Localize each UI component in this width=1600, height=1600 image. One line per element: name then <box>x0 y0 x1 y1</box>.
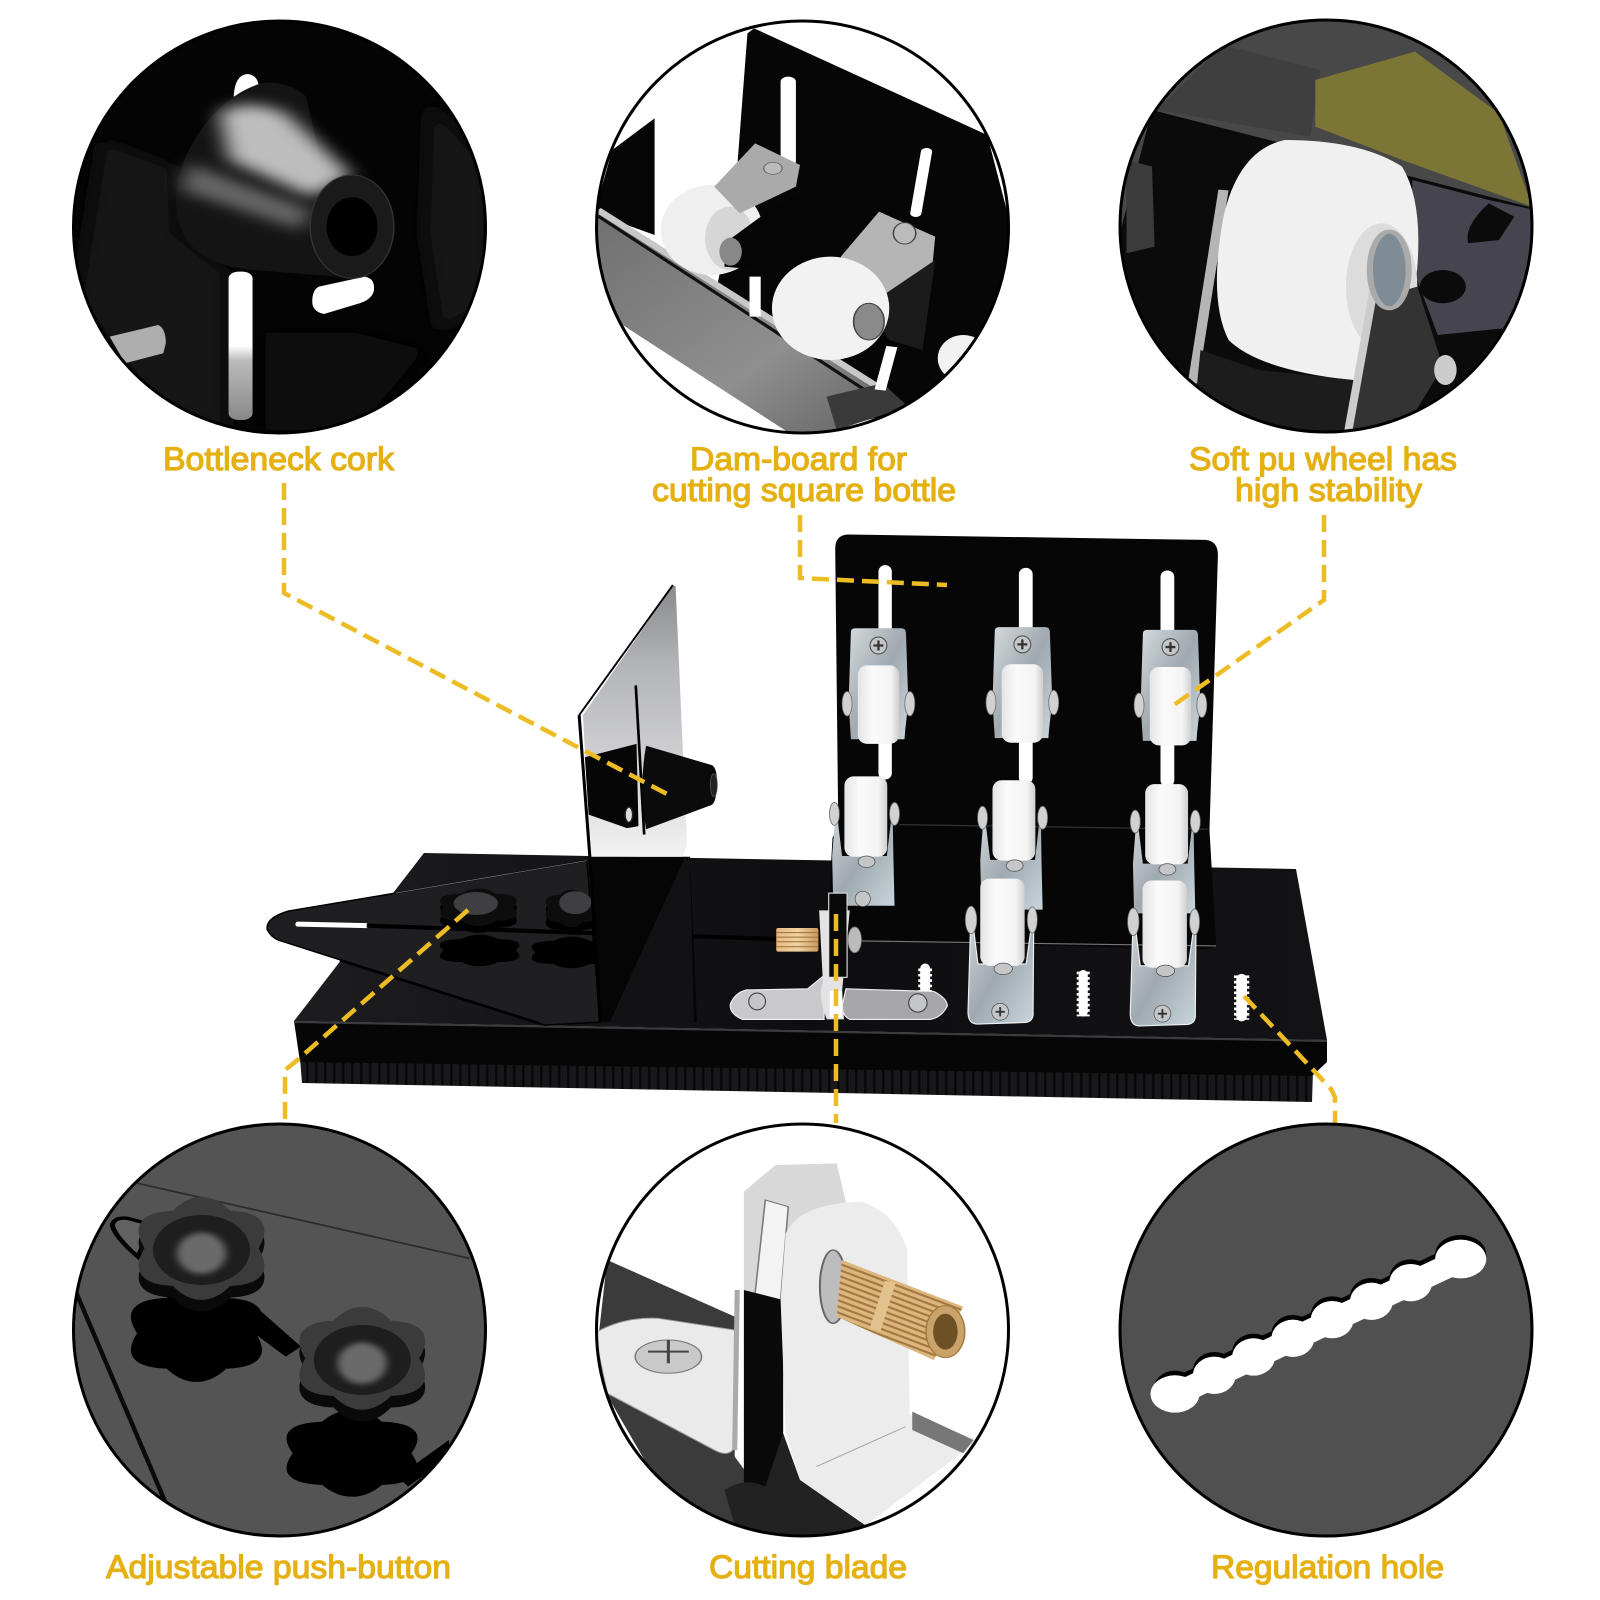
right assembly <box>730 535 1242 1026</box>
icon: olive reflection <box>1315 52 1532 207</box>
label: Soft pu wheel has high stability <box>1189 441 1457 508</box>
icon: top slot <box>234 74 259 97</box>
icon: white wheel <box>1193 140 1418 383</box>
label: Regulation hole: Regulation hole <box>1211 1549 1444 1585</box>
label: Soft pu wheel has high stability: high stability <box>1235 472 1422 508</box>
caster: top right <box>1134 630 1207 745</box>
icon: mounting lug and screw <box>594 1318 735 1453</box>
label: Dam-board for cutting square bottle: Dam-board for <box>690 441 907 477</box>
leader line: regulation hole <box>1244 996 1335 1123</box>
vertical cork sheet <box>579 585 697 1022</box>
caster: middle center <box>978 780 1048 910</box>
icon: upper wheel <box>661 143 806 282</box>
leader line: bottleneck cork <box>284 483 667 794</box>
caster: top middle <box>986 627 1059 743</box>
panel: cutting blade detail <box>592 1120 1015 1543</box>
label: Dam-board for cutting square bottle <box>652 441 956 508</box>
label: Bottleneck cork: Bottleneck cork <box>163 441 395 477</box>
cutting blade assembly <box>730 893 947 1019</box>
caster: middle left <box>829 776 900 907</box>
icon: bracket and nut <box>1195 232 1457 437</box>
caster: top left <box>842 628 915 744</box>
icon: black cone cork <box>176 83 394 278</box>
caster: bottom right <box>1128 881 1200 1026</box>
icon: knob reflections <box>136 1288 412 1494</box>
caster: middle right <box>1130 784 1200 914</box>
icon: knob one <box>144 1200 259 1308</box>
panel: adjustable push-button detail <box>71 1120 490 1540</box>
panel: bottleneck cork detail <box>71 17 490 437</box>
panel: regulation hole detail <box>1111 1117 1540 1540</box>
icon: silver bracket plate <box>781 1202 979 1525</box>
icon: scalloped slot <box>1151 1235 1486 1413</box>
adjustable fence plate <box>267 861 600 1025</box>
icon: right oblong hole <box>312 277 374 314</box>
icon: knob two <box>305 1310 420 1418</box>
leader line: cutting blade <box>834 914 838 1123</box>
leader line: soft pu wheel <box>1171 515 1324 707</box>
icon: lower wheel <box>772 212 974 374</box>
base top surface <box>294 853 1327 1040</box>
L-shaped caster backboard <box>829 535 1218 949</box>
icon: long vertical slot <box>229 272 253 420</box>
icon: left oblong hole <box>110 325 166 363</box>
brass insert <box>776 928 818 952</box>
label: Adjustable push-button: Adjustable push-button <box>106 1549 451 1585</box>
base front face <box>294 1021 1327 1076</box>
base lower ribbed strip <box>300 1058 1313 1102</box>
leader line: adjustable push-button <box>285 910 468 1123</box>
cork bracket and cone <box>585 685 717 835</box>
backboard slots <box>878 565 1174 787</box>
label: Soft pu wheel has high stability: Soft pu wheel has <box>1189 441 1457 477</box>
panel: soft PU wheel detail <box>1111 13 1540 437</box>
panel: dam-board detail <box>592 17 1020 440</box>
label: Dam-board for cutting square bottle: cutting square bottle <box>652 472 956 508</box>
product: bottle cutter <box>267 535 1327 1102</box>
label: Cutting blade: Cutting blade <box>709 1549 907 1585</box>
knobs on fence <box>443 890 608 967</box>
leader line: dam-board <box>800 515 947 585</box>
icon: blade housing <box>735 1163 847 1520</box>
icon: board slots <box>755 77 927 390</box>
base regulation slots <box>925 969 1242 1020</box>
icon: brass insert <box>820 1250 965 1360</box>
icon: mirror panel <box>598 214 871 432</box>
left assembly <box>267 585 778 1025</box>
caster: bottom center <box>965 879 1037 1024</box>
fence slot <box>298 924 778 939</box>
